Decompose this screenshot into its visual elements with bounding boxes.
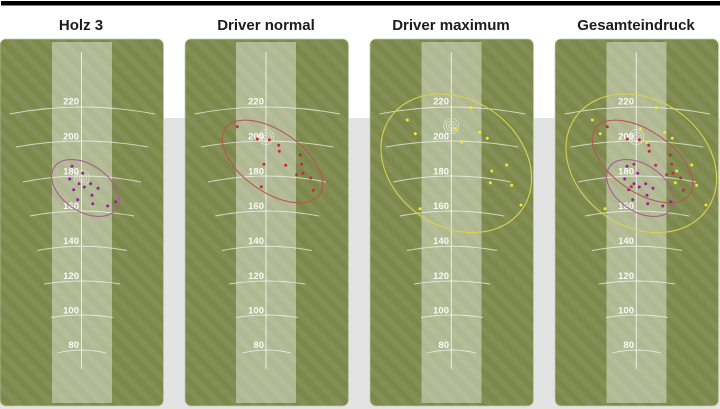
distance arcs (194, 107, 340, 353)
panel: Driver maximum (354, 17, 558, 406)
panel: Driver normal (185, 17, 348, 406)
distance labels: 180 (433, 166, 449, 178)
purple ellipse (596, 148, 684, 228)
shot dots (68, 165, 117, 208)
distance labels: 180 (618, 166, 634, 178)
distance labels: 160 (618, 201, 634, 212)
shot dots (236, 125, 315, 192)
yellow dots (591, 106, 708, 210)
center line (80, 52, 82, 369)
distance labels: 80 (68, 340, 79, 351)
target (259, 130, 274, 144)
dispersion ellipse (208, 104, 337, 219)
distance labels: 220 (618, 96, 634, 108)
distance labels: 180 (248, 166, 264, 178)
distance labels: 200 (63, 132, 79, 142)
red ellipse (578, 104, 707, 219)
shot dots (406, 106, 522, 210)
distance labels: 120 (63, 271, 79, 282)
distance labels: 140 (248, 236, 264, 247)
dispersion ellipse (354, 65, 558, 261)
green field (185, 39, 348, 406)
distance labels: 120 (248, 271, 264, 282)
distance labels: 200 (433, 132, 449, 142)
distance labels: 140 (63, 236, 79, 247)
distance arcs (564, 107, 710, 353)
distance labels: 160 (433, 201, 449, 212)
yellow ellipse (539, 65, 720, 261)
dispersion ellipse (41, 148, 129, 228)
center line (265, 52, 267, 369)
distance labels: 100 (433, 306, 449, 316)
fairway (236, 42, 296, 403)
fairway (606, 42, 666, 403)
distance labels: 120 (618, 271, 634, 282)
distance labels: 80 (623, 340, 634, 351)
heading: Driver normal: Driver normal (217, 17, 315, 34)
distance labels: 220 (63, 96, 79, 108)
distance labels: 80 (438, 340, 449, 351)
heading: Gesamteindruck: Gesamteindruck (577, 17, 695, 34)
distance arcs (380, 107, 525, 353)
panel: Gesamteindruck (539, 17, 720, 406)
fairway (422, 42, 482, 403)
distance labels: 80 (253, 340, 264, 351)
distance labels: 120 (433, 271, 449, 282)
green field (555, 39, 718, 406)
distance labels: 160 (248, 201, 264, 212)
distance labels: 100 (63, 306, 79, 316)
distance labels: 220 (433, 96, 449, 108)
panel: Holz 3 (0, 17, 164, 406)
green field (0, 39, 164, 406)
distance arcs (10, 107, 155, 353)
distance labels (433, 96, 449, 351)
distance labels (63, 96, 79, 351)
distance labels: 180 (63, 166, 79, 178)
distance labels: 140 (433, 236, 449, 247)
green field (370, 39, 534, 406)
target (629, 130, 644, 144)
distance labels: 200 (618, 132, 634, 142)
heading: Holz 3: Holz 3 (59, 17, 103, 34)
distance labels: 160 (63, 201, 79, 212)
center line (450, 52, 452, 369)
distance labels: 100 (248, 306, 264, 316)
distance labels: 100 (618, 306, 634, 316)
distance labels: 220 (248, 96, 264, 108)
target (444, 118, 459, 134)
distance labels (248, 96, 264, 351)
distance labels: 140 (618, 236, 634, 247)
heading: Driver maximum: Driver maximum (392, 17, 510, 34)
target (74, 170, 89, 186)
distance labels (618, 96, 634, 351)
center line (635, 52, 637, 369)
fairway (52, 42, 112, 403)
red dots (606, 125, 685, 192)
purple dots (623, 165, 672, 208)
distance labels: 200 (248, 132, 264, 142)
